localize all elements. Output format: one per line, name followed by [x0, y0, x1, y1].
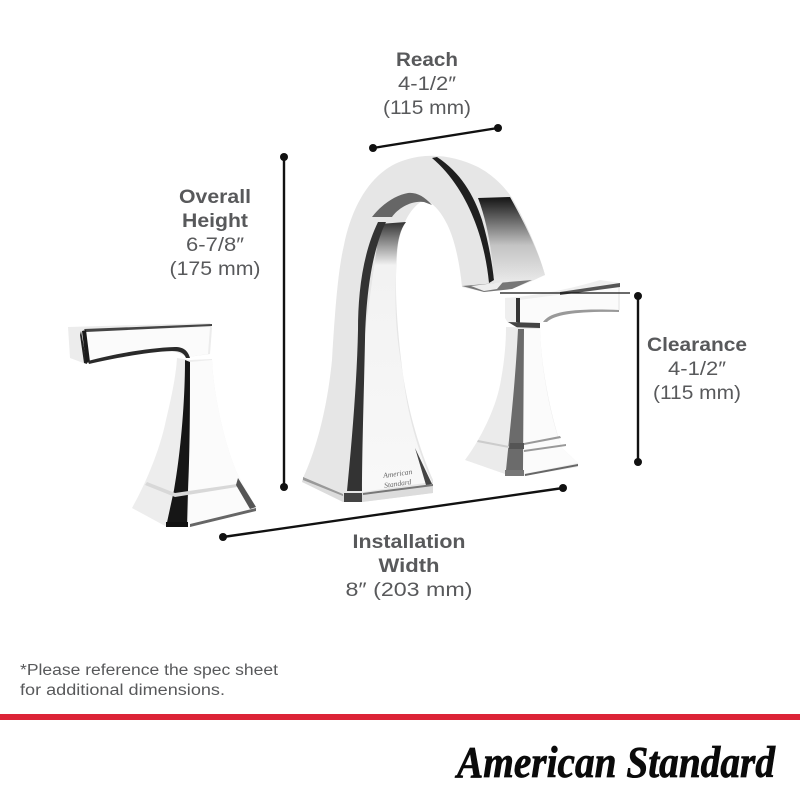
footnote: *Please reference the spec sheet	[20, 662, 279, 679]
clearance dimension line	[634, 292, 642, 466]
footnote: for additional dimensions.	[20, 682, 225, 699]
label: installation width	[346, 531, 472, 601]
label: clearance: 4-1/2″	[668, 358, 726, 380]
label: reach: 4-1/2″	[398, 73, 456, 95]
installation width dimension line	[219, 484, 567, 541]
label: overall height	[170, 186, 260, 280]
label: overall height: Height	[182, 210, 249, 232]
faucet logo mark	[382, 467, 413, 490]
label: reach: (115 mm)	[383, 97, 471, 119]
label: installation width: Width	[378, 555, 440, 577]
label: installation width: Installation	[352, 531, 466, 553]
right handle	[465, 280, 620, 476]
label: overall height: Overall	[179, 186, 251, 208]
faucet logo mark: Standard	[384, 477, 412, 490]
label: reach	[383, 49, 471, 119]
label: overall height: (175 mm)	[170, 258, 260, 280]
left handle	[68, 323, 257, 527]
faucet spout	[302, 156, 545, 502]
reach dimension line	[369, 124, 502, 152]
label: installation width: 8″ (203 mm)	[346, 579, 472, 601]
label: reach: Reach	[396, 49, 458, 71]
overall height dimension line	[280, 153, 288, 491]
label: clearance: Clearance	[647, 334, 747, 356]
footnote	[20, 662, 279, 699]
spout base	[302, 448, 433, 502]
red divider bar	[0, 714, 800, 720]
faucet logo mark: American	[382, 467, 413, 480]
label: clearance	[647, 334, 747, 404]
label: clearance: (115 mm)	[653, 382, 741, 404]
label: overall height: 6-7/8″	[186, 234, 244, 256]
clearance guide line	[500, 292, 630, 294]
